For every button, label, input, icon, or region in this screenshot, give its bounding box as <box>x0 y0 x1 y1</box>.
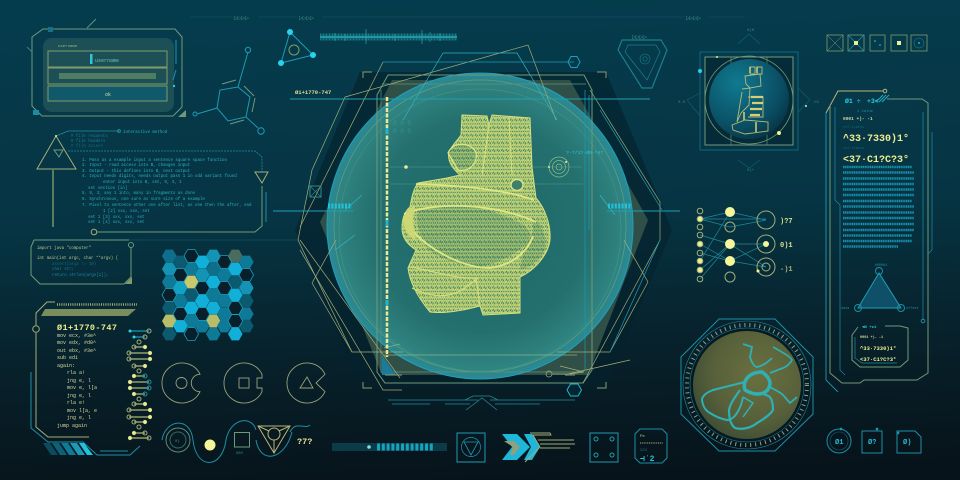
panel: right data column: ◄Ø +ƨ1 <box>862 325 877 330</box>
panel: code window <box>37 130 300 240</box>
panel: small code box: assert(argc != 10) <box>52 262 96 267</box>
panel: code window: 4. Input needs digits, needs output pass 1 in odd variant found <box>82 174 237 179</box>
panel: right data column: ref.status <box>843 146 864 151</box>
panel: code window: set 1 [4] xxx, xxx, set <box>88 220 145 225</box>
panel: small code box: import java "computer" <box>37 246 91 251</box>
icons: numbered badges: Ø? <box>868 438 876 447</box>
chart: waveform <box>320 29 457 44</box>
panel: code window: enter input into B, set, 9, 3, 1 <box>103 180 182 185</box>
icon: microscope lens: 0-0 <box>678 101 686 105</box>
panel: code window: # file access <box>71 144 103 149</box>
bottom wave icons: G03 <box>236 452 244 456</box>
panel: right data column: ref.status <box>843 125 864 130</box>
icon: petri dish <box>681 319 813 451</box>
panel: right data column: <37·C1?C?3° <box>860 356 896 363</box>
icon: microscope lens: -01 <box>812 101 820 105</box>
bottom wave icons: ?7? <box>297 437 312 447</box>
panel: code window: # file requests <box>71 134 108 139</box>
icons: notched circles <box>162 363 325 403</box>
chart: neural network: )?7 <box>780 218 793 226</box>
top arrow strip: ▷▷▷▷ <box>632 34 648 42</box>
bottom progress bar <box>332 443 447 451</box>
icon: tag box: ⊣ˈ2 <box>640 455 655 464</box>
panel: assembly listing: rla e! <box>67 400 85 406</box>
top arrow strip: ▷▷▷▷ <box>686 15 702 23</box>
icons: numbered badges: Ø) <box>903 438 911 447</box>
panel: code window: set section [in] <box>88 186 127 191</box>
panel: right data column <box>826 89 932 392</box>
panel: code window: 1 [2] xxx, xxx, set <box>103 209 150 214</box>
panel: right data column: +3< <box>867 98 879 105</box>
central scanner: 0 0 0 <box>393 128 411 135</box>
panel: assembly listing: mov edx, #d0^ <box>57 340 96 346</box>
panel: right data column: offset <box>906 306 919 311</box>
panel: assembly listing: out ebx, #3e^ <box>57 348 96 354</box>
panel: right data column: #00001 <box>875 264 887 268</box>
icon: chevron arrows <box>502 433 575 462</box>
panel: right data column: ^33·7330)1° <box>860 345 896 352</box>
panel: small code box: char str; <box>52 267 74 272</box>
panel: right data column: 1 value <box>857 109 874 114</box>
icon: triangle square <box>457 433 485 462</box>
icon: rounded triangle <box>618 40 667 88</box>
icons: top right squares <box>827 35 927 51</box>
icon: tag box: Pe <box>640 435 645 439</box>
panel: code window: # file headers <box>71 139 106 144</box>
bottom wave icons: 0) <box>175 439 180 444</box>
panel: assembly listing: mov e, l[a <box>67 385 97 391</box>
panel: assembly listing: rla a! <box>67 370 85 376</box>
chart: hexagon grid <box>162 250 254 340</box>
pin ladder <box>127 329 152 440</box>
panel: assembly listing: again: <box>57 363 75 369</box>
panel: right data column: 0001 +)- -1 <box>843 116 873 122</box>
panel: small code box: int main(int argc, char **argv) { <box>37 256 119 261</box>
icon: microscope lens <box>678 28 820 173</box>
icons: numbered badges: Ø1 <box>835 438 843 447</box>
chart: neural network <box>697 207 793 282</box>
central scanner <box>273 45 680 410</box>
panel: right data column: <37·C1?C?3° <box>843 154 909 166</box>
panel: assembly listing: mov ecx, #3e^ <box>57 333 96 339</box>
central scanner: 0 0 0 <box>393 120 411 127</box>
icon: tag box <box>635 429 667 464</box>
central scanner: ?-7/1?-Ø9-?47 <box>566 149 604 156</box>
icon: molecule <box>193 47 264 134</box>
panel: assembly listing: Ø1+1770-747 <box>57 323 117 333</box>
panel: code window: 5. 9, 3, any 1 into, many in fragments as done <box>82 191 196 196</box>
panel: login box: ok <box>105 92 111 98</box>
heart wireframe <box>402 115 550 315</box>
icon: microscope lens: 0)0 <box>747 28 755 33</box>
panel: assembly listing: mov l[a, e <box>67 408 97 414</box>
top arrow strip: ▷▷▷▷ <box>234 15 250 23</box>
panel: right data column: Ø1 ÷ <box>845 97 861 105</box>
panel: code window: 2. Input - read access into B, changes input <box>82 163 191 168</box>
panel: assembly listing: sub edi <box>57 355 78 361</box>
panel: small code box: return strlen(argv[1]); <box>52 273 109 278</box>
panel: assembly listing: jump again <box>57 423 87 429</box>
bottom wave icons <box>162 421 312 462</box>
panel: code window: 1. Pass as a example input a sentence square space function <box>82 158 227 163</box>
panel: code window: 6. Synchronous, one sure as sure size of a example <box>82 197 205 202</box>
panel: right data column: ^33·7330)1° <box>843 133 909 145</box>
panel: login box: username <box>95 58 119 64</box>
icon: four dots square <box>590 433 618 462</box>
icon: microscope lens: 0)+ <box>747 168 755 173</box>
top arrow strip <box>190 15 745 42</box>
panel: right data column: data <box>841 306 849 311</box>
panel: right data column: 0001 +)- -1 <box>860 335 883 340</box>
panel: code window: set 1 [3] xxx, xxx, set <box>88 215 145 220</box>
panel: assembly listing: jng e, l <box>67 415 91 421</box>
icon: tag box: △△△ <box>640 447 648 452</box>
icons: numbered badges <box>827 428 921 453</box>
icon: triangle nodes <box>278 29 316 66</box>
panel: code window: interactive method <box>123 130 168 135</box>
panel: small code box <box>31 240 134 284</box>
chart: neural network: -)1 <box>780 266 793 274</box>
panel: code window: 3. Output - this defines into B, next output <box>82 169 191 174</box>
central scanner: Ø1+1770-747 <box>295 89 331 96</box>
top arrow strip: ▷▷▷▷ <box>299 15 315 23</box>
panel: assembly listing <box>31 302 140 455</box>
chart: neural network: 0)1 <box>780 242 793 250</box>
panel: assembly listing: jng e, l <box>67 378 91 384</box>
panel: code window: 7. Pixel to sentence other one after list, as one then the after, end <box>82 203 252 208</box>
panel: assembly listing: jng e, l <box>67 393 91 399</box>
panel: login box <box>27 19 186 117</box>
panel: login box: username <box>58 44 78 49</box>
